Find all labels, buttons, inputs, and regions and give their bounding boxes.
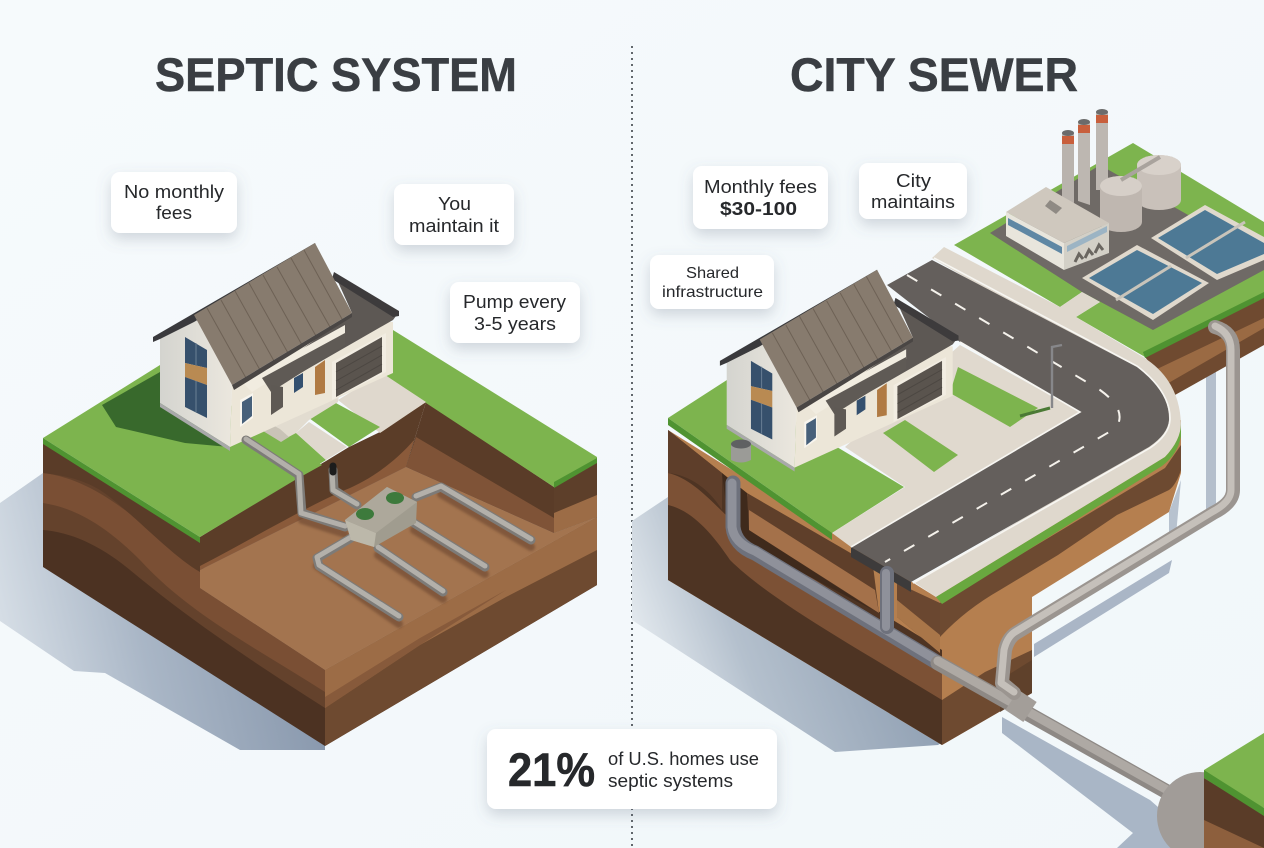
plant pad: [990, 165, 1264, 330]
ground shadow: city block: [632, 497, 1020, 752]
callout: monthly fees: [693, 166, 828, 229]
callout: shared infrastructure: Shared: [686, 265, 739, 282]
title: septic system: SEPTIC SYSTEM: [155, 48, 517, 101]
treatment plant: [1006, 109, 1264, 320]
riser pipe up to plant: [1001, 326, 1233, 693]
callout: shared infrastructure: [650, 255, 774, 309]
callout: shared infrastructure: infrastructure: [662, 284, 763, 301]
callout: 21% statistic: 21%: [508, 743, 595, 796]
grass: front lawn: [43, 365, 326, 543]
callout: you maintain it: You: [438, 193, 471, 214]
neighbouring soil block: [1204, 733, 1264, 848]
callout: no monthly fees: fees: [156, 202, 192, 223]
treatment inlet dome: [1157, 772, 1243, 848]
callout: you maintain it: [394, 184, 514, 245]
pit floor: [200, 467, 597, 670]
street lamp: [1020, 345, 1062, 416]
main sewer line, exposed section: [938, 661, 1169, 793]
pit back-left wall: [200, 402, 426, 570]
callout: monthly fees: Monthly fees: [704, 176, 817, 197]
driveway and front path: [263, 373, 426, 460]
right face: [325, 517, 597, 746]
recessed trench panel: [722, 473, 873, 610]
grass patches on driveway: [883, 367, 1038, 472]
divider: dotted centre line: [631, 46, 633, 848]
sewer pipes: [732, 326, 1233, 793]
plant building: [1006, 187, 1109, 270]
grass: right strip: [382, 330, 597, 488]
callout: you maintain it: maintain it: [409, 215, 499, 236]
panel: septic system cross-section: [0, 243, 597, 750]
callout: no monthly fees: [111, 172, 237, 233]
callout: city maintains: [859, 163, 967, 219]
soil block: septic: [43, 402, 597, 746]
title: city sewer: CITY SEWER: [790, 48, 1078, 101]
pipe shadows: [302, 494, 531, 624]
callout: 21% statistic: septic systems: [608, 771, 733, 791]
callout: city maintains: City: [896, 170, 932, 191]
house: city: [720, 270, 959, 471]
house: septic: [153, 243, 399, 451]
septic tank: [345, 487, 417, 547]
road: [851, 258, 1170, 592]
callout: pump every 3-5 years: Pump every: [463, 291, 567, 312]
storage tanks: [1100, 155, 1181, 232]
panel: city sewer cross-section: [632, 109, 1264, 848]
septic outflow pipes: [246, 439, 531, 617]
callout: no monthly fees: No monthly: [124, 181, 225, 202]
soil block: plant platform: [1145, 297, 1264, 395]
callout: 21% statistic: [487, 729, 777, 809]
callout: pump every 3-5 years: [450, 282, 580, 343]
treatment ponds: [1082, 205, 1264, 320]
curved soil band under sidewalk: [940, 445, 1181, 637]
rain barrel / manhole riser: [731, 440, 751, 462]
right strip end face: [554, 462, 597, 533]
main sewer line, buried section: [732, 483, 938, 663]
pipe ground shadows: [1002, 355, 1216, 848]
pit back-right wall: [406, 402, 554, 533]
sidewalk: [915, 247, 1181, 597]
callout: pump every 3-5 years: 3-5 years: [474, 313, 556, 334]
lower right corner: [942, 650, 1032, 745]
callout: 21% statistic: of U.S. homes use: [608, 749, 759, 769]
grass: road edge strip: [936, 423, 1181, 604]
grass: plant lawn: [954, 143, 1264, 358]
soil block: city: [668, 420, 1181, 745]
callout: monthly fees: $30-100: [720, 198, 797, 219]
callout: city maintains: maintains: [871, 191, 955, 212]
concrete driveway: [832, 345, 1080, 547]
smokestacks: [1062, 109, 1108, 205]
left face strata: [668, 430, 942, 745]
grass: front yard: [668, 378, 904, 540]
ground shadow: septic block: [0, 473, 325, 750]
